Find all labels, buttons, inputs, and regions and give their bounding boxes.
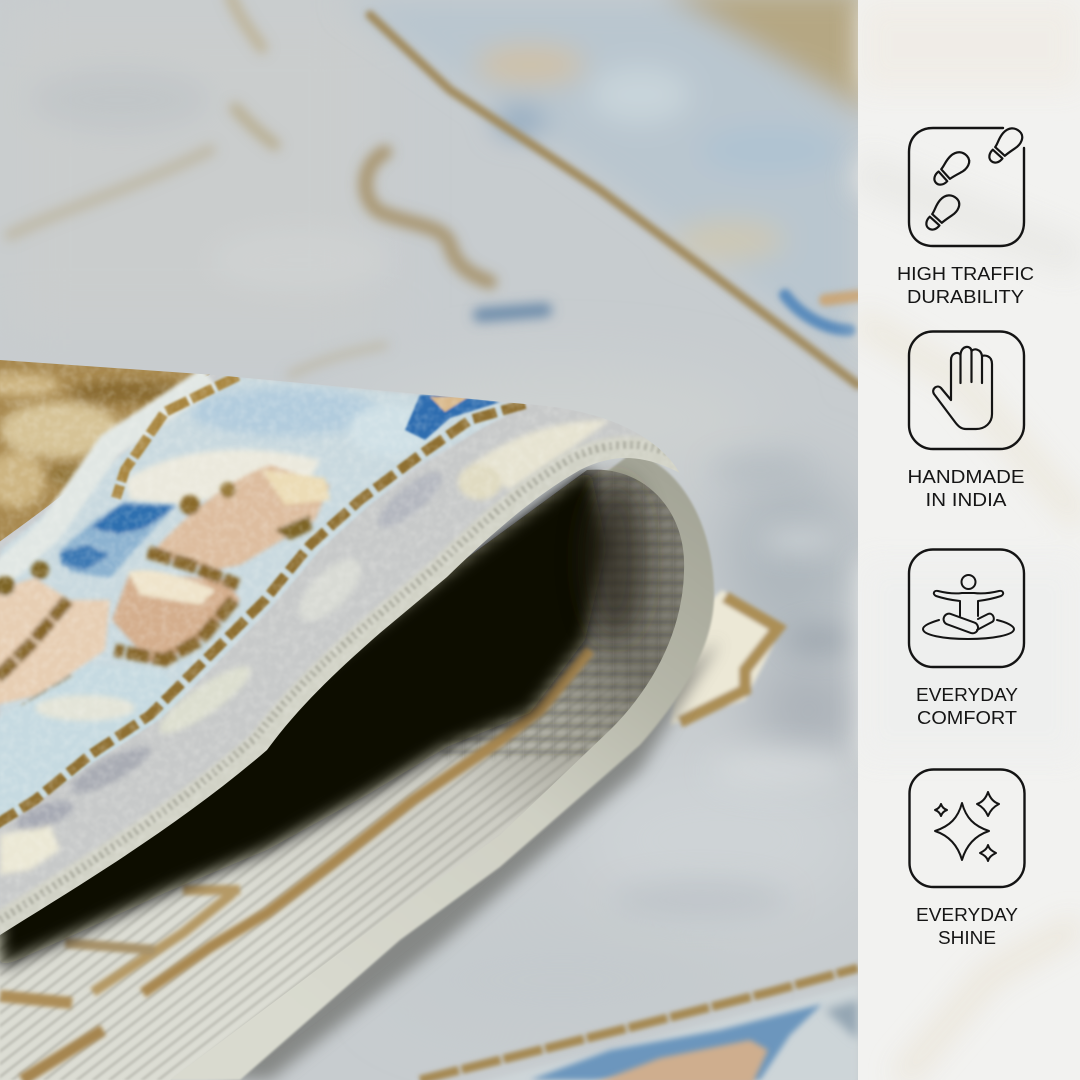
feature: everyday shine <box>910 770 1024 948</box>
label: handmade in india: IN INDIA <box>926 490 1006 510</box>
label: high traffic durability: DURABILITY <box>907 287 1024 307</box>
label: everyday comfort: EVERYDAY <box>916 685 1018 705</box>
face: peach flower petals <box>0 465 330 710</box>
label: high traffic durability: HIGH TRAFFIC <box>897 264 1034 284</box>
face: grey outer band with cream patches <box>4 428 486 828</box>
icon: sparkles <box>910 770 1024 887</box>
face: pale lower field <box>0 674 166 814</box>
rolled rug: outer binding rim <box>170 458 715 1080</box>
mottled floor blotches <box>30 70 855 920</box>
label: everyday shine: SHINE <box>938 928 996 948</box>
bottom-right border band <box>420 968 858 1080</box>
shadow under roll <box>220 640 720 1080</box>
icon: seated meditation figure <box>909 550 1024 667</box>
face: pale blue field <box>0 378 505 716</box>
blurred border band, top right <box>375 0 858 344</box>
label: everyday comfort: COMFORT <box>917 708 1017 728</box>
face: blue diamond <box>60 502 176 578</box>
face: pile grain <box>0 360 665 907</box>
right feature panel <box>858 0 1080 1080</box>
feature: high traffic durability <box>897 124 1034 307</box>
face: cream border stripes <box>0 378 210 580</box>
feature: handmade in india <box>908 332 1024 510</box>
rolled rug: underside weave and gold lines <box>0 470 684 1080</box>
face: stitched selvedge along lower edge <box>0 445 680 935</box>
face: gold border line <box>0 404 525 825</box>
label: everyday shine: EVERYDAY <box>916 905 1018 925</box>
icon: footprints <box>909 124 1026 246</box>
face: blue accent at top <box>405 395 500 440</box>
feature: everyday comfort <box>909 550 1024 728</box>
panel soft background streaks <box>858 0 1080 1080</box>
gold border lines <box>10 0 858 385</box>
face: gold inner stripe <box>116 376 238 498</box>
face: tan medallion corner <box>0 355 215 545</box>
icon: hand <box>909 332 1024 449</box>
underside gold stepped lines <box>0 650 590 1080</box>
label: handmade in india: HANDMADE <box>908 467 1024 487</box>
rolled rug: pile face <box>0 360 678 935</box>
motif behind rolled edge <box>670 590 782 725</box>
rolled rug: dark hollow <box>0 468 645 968</box>
